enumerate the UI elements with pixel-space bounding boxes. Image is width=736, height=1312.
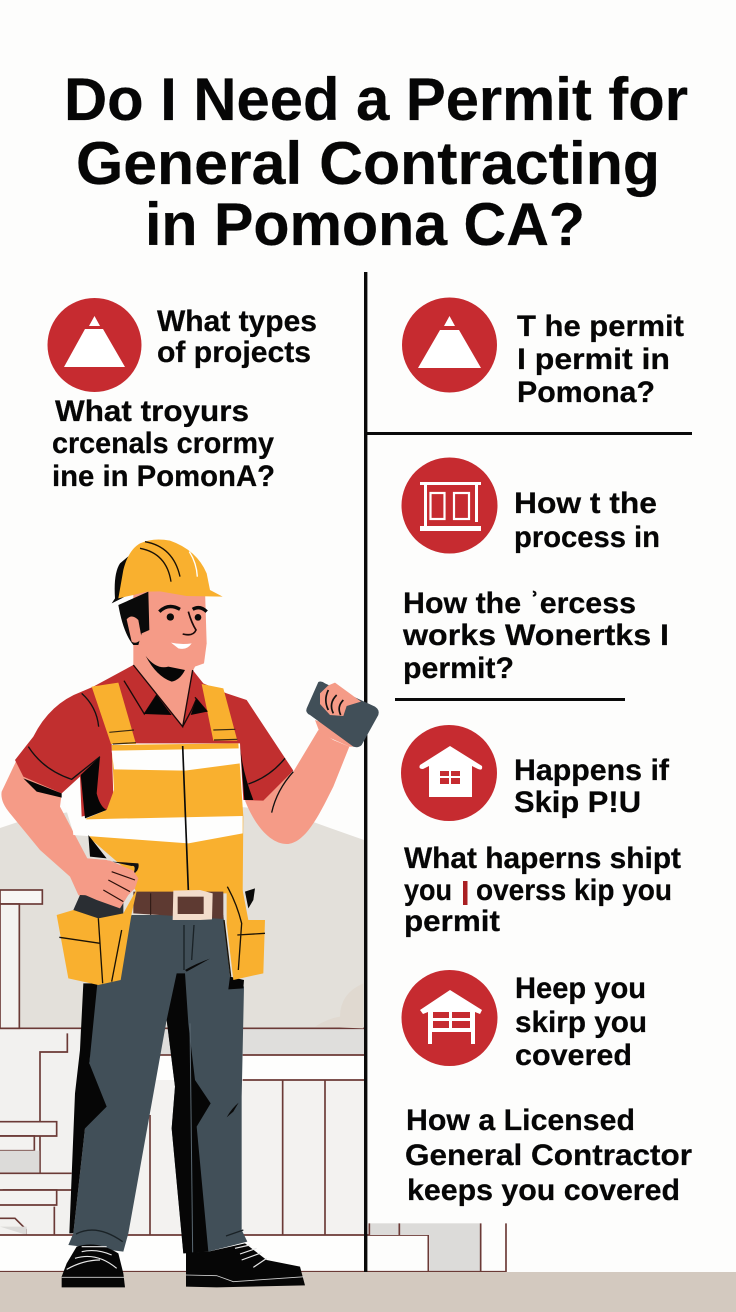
title [64,66,688,258]
section 3: the process: How the ʾercess [403,587,636,620]
title: in Pomona CA? [145,191,585,258]
section 4: what happens if you skip: overss kip you [476,874,672,907]
section 2: the permit [402,298,684,409]
section 5: how a licensed contractor keeps you covered: General Contractor [405,1139,692,1172]
worker illustration [1,539,379,1287]
section 3: the process: permit? [403,652,514,685]
section 1: what types of projects: What troyurs [55,395,249,428]
section 5: how a licensed contractor keeps you covered: keeps you covered [407,1174,680,1207]
section 4: what happens if you skip: Skip P!U [514,786,641,819]
icon: house badge [401,725,497,821]
section 2: the permit: I permit in [517,343,670,376]
red bar glyph [463,881,468,905]
worker lower body [57,880,305,1287]
section 4: what happens if you skip: you [404,874,452,907]
title: Do I Need a Permit for [64,66,688,133]
divider: horizontal upper [367,432,692,435]
section 1: what types of projects: crcenals crormy [52,427,274,460]
section 5: how a licensed contractor keeps you covered: How a Licensed [406,1104,635,1137]
section 4: what happens if you skip: What haperns shipt [404,842,681,875]
divider: horizontal lower [395,698,625,701]
section 5: how a licensed contractor keeps you covered [402,970,692,1207]
section 2: the permit: Pomona? [517,376,655,409]
worker hand on belt [71,858,139,908]
title: General Contracting [76,130,660,197]
section 3: the process: works Wonertks I [402,619,669,652]
section 2: the permit: T he permit [517,310,684,343]
icon: triangle badge [48,298,142,392]
divider: vertical [364,272,367,1272]
section 1: what types of projects [48,298,317,493]
section 4: what happens if you skip: Happens if [514,754,670,787]
icon: double door frame badge [402,458,498,554]
section 3: the process: process in [514,521,660,554]
section 5: how a licensed contractor keeps you covered: covered [515,1039,632,1072]
section 3: the process: How t the [514,487,657,520]
section 4: what happens if you skip: permit [404,905,500,938]
worker upper body [1,539,379,908]
section 1: what types of projects: of projects [157,336,311,369]
section 3: the process [402,458,669,685]
section 4: what happens if you skip [401,725,681,938]
icon: triangle badge [402,298,497,392]
section 1: what types of projects: What types [157,305,317,338]
section 5: how a licensed contractor keeps you covered: skirp you [515,1006,647,1039]
background: construction site [0,800,736,1312]
section 5: how a licensed contractor keeps you covered: Heep you [515,972,646,1005]
icon: house frame badge [402,970,498,1066]
section 1: what types of projects: ine in PomonA? [52,460,275,493]
